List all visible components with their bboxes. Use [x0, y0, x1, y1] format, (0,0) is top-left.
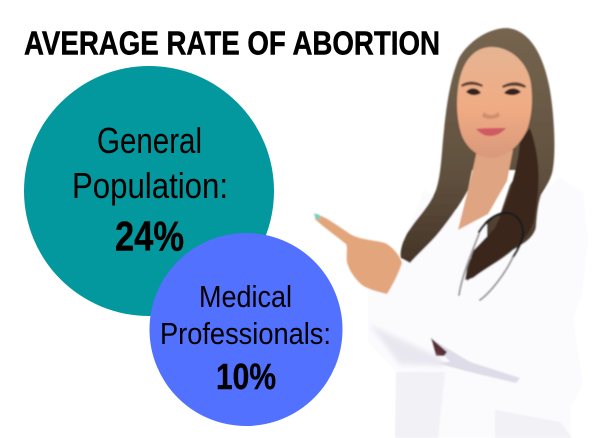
inner coat lining — [431, 338, 447, 356]
label: medical professionals: Professionals: — [160, 316, 331, 351]
label: general population — [72, 120, 228, 206]
label: medical professionals — [160, 279, 331, 351]
label: medical professionals: Medical — [199, 279, 292, 314]
fingernail — [314, 214, 321, 220]
panel: medical professionals circle — [150, 233, 342, 426]
coat — [368, 177, 588, 438]
hand and pointing finger — [315, 215, 402, 294]
neck and chest — [458, 150, 513, 230]
dark right hair strand — [467, 128, 539, 281]
label: general population: Population: — [72, 165, 228, 206]
illustration: doctor pointing at the circles — [314, 28, 588, 438]
nose shadow — [482, 112, 500, 119]
hair back — [401, 28, 554, 280]
face — [457, 47, 532, 158]
eyebrows — [461, 82, 526, 88]
value: 24%: 24% — [115, 212, 184, 260]
stethoscope — [459, 213, 523, 300]
label: general population: General — [97, 120, 202, 161]
lips — [476, 128, 506, 136]
lower coat shade — [395, 372, 445, 438]
forearm fold shadow — [430, 338, 520, 383]
panel: general population circle — [24, 66, 274, 316]
eyes — [466, 88, 521, 95]
value: 10%: 10% — [216, 356, 276, 397]
title: AVERAGE RATE OF ABORTION — [24, 24, 440, 62]
